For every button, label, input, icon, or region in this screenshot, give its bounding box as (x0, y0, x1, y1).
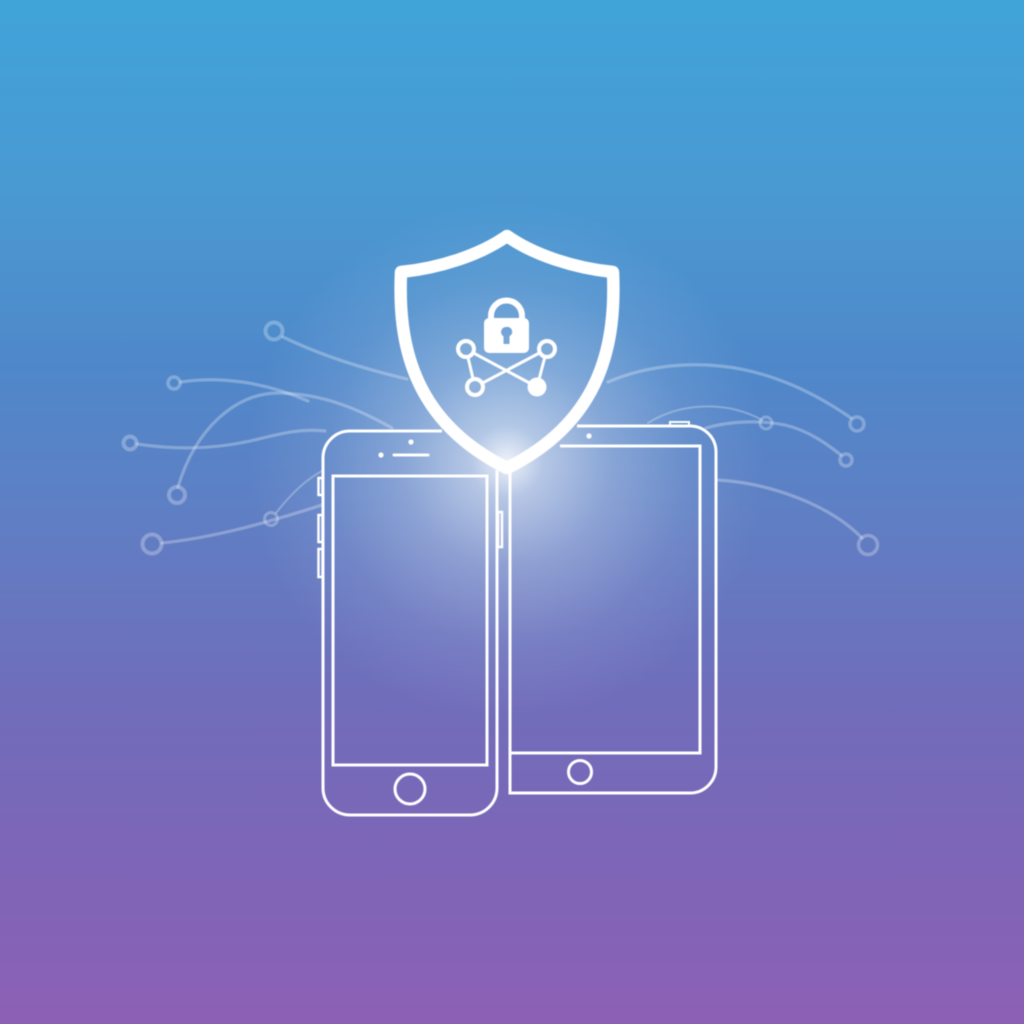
network lines: right (608, 365, 878, 554)
tablet body (510, 426, 716, 793)
phone side buttons (318, 478, 502, 577)
central glow (197, 152, 817, 772)
network lines: left (124, 322, 407, 554)
node line 6 (264, 471, 322, 526)
icon: tablet (510, 422, 716, 793)
phone camera dots (378, 439, 414, 458)
icon: smartphone (318, 431, 502, 815)
phone screen (333, 476, 487, 765)
tablet camera (586, 433, 592, 439)
node line 9 (706, 422, 852, 466)
phone body (323, 431, 497, 815)
shield outline (401, 236, 613, 468)
node line 3 (169, 393, 392, 503)
network node symbol (458, 341, 555, 396)
node line 8 (648, 406, 772, 429)
node line 1 (266, 322, 407, 379)
tablet home button (568, 760, 592, 784)
node line 4 (124, 430, 325, 450)
node line 10 (718, 480, 878, 554)
tablet top button (670, 422, 689, 426)
node line 7 (608, 365, 864, 431)
node line 5 (142, 505, 322, 554)
phone speaker (394, 454, 428, 456)
tablet screen (510, 446, 700, 753)
phone home button (395, 774, 425, 804)
node line 2 (168, 377, 308, 401)
icon: security shield (401, 236, 613, 468)
padlock (484, 300, 529, 353)
